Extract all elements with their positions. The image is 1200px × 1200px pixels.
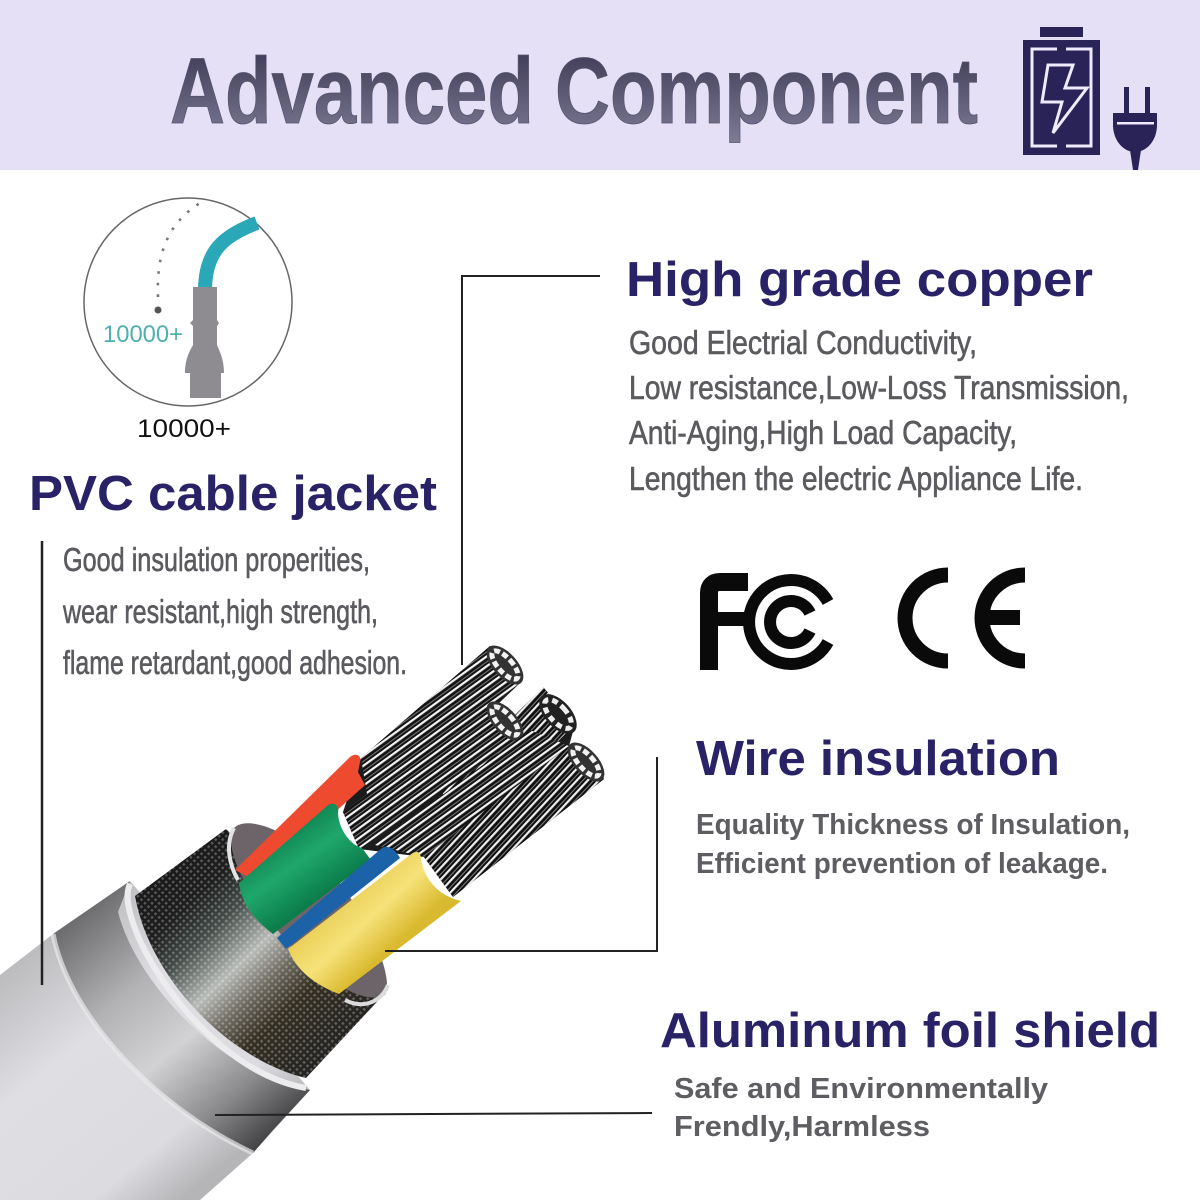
logo: CE (905, 575, 1025, 661)
text: shield features: Frendly,Harmless (674, 1111, 930, 1143)
collar highlight (53, 934, 253, 1153)
text: shield features (674, 1073, 1048, 1143)
yellow wire (288, 852, 461, 994)
text: insulation features: Efficient prevention of leakage. (696, 848, 1108, 880)
jacket ring (128, 884, 306, 1088)
text: insulation features (696, 809, 1130, 880)
icon: plug (1113, 87, 1157, 170)
strands: copper bundle three (424, 746, 604, 897)
text: jacket features: flame retardant,good adhesion. (63, 644, 407, 681)
strands: copper bundle one (361, 646, 520, 800)
label: 10000+: 10000+ (137, 415, 231, 443)
callout line: wire insulation (385, 757, 657, 951)
strands: copper bundle two (343, 703, 520, 849)
heading: wire insulation: Wire insulation (696, 732, 1060, 786)
shield end opening (231, 823, 387, 998)
red wire (235, 755, 365, 882)
heading: aluminum foil shield: Aluminum foil shield (660, 1004, 1160, 1058)
text: shield features: Safe and Environmentally (674, 1073, 1048, 1105)
strands: back bundle (440, 687, 575, 830)
text: insulation features: Equality Thickness of Insulation, (696, 809, 1130, 841)
text: copper features: Good Electrial Conductivity, (629, 324, 977, 361)
text: copper features (629, 324, 1129, 497)
text: copper features: Lengthen the electric Appliance Life. (629, 460, 1083, 497)
braided shield (135, 829, 388, 1078)
strands: base mass (343, 646, 604, 897)
title: Advanced Component (170, 38, 978, 143)
icon: battery (1023, 27, 1100, 155)
text: jacket features (62, 541, 407, 681)
icon: bend test circle: 10000+ (103, 321, 183, 348)
icon: bend test circle (84, 198, 292, 406)
callout line: jacket (41, 541, 43, 985)
text: copper features: Anti-Aging,High Load Capacity, (629, 414, 1017, 451)
heading: pvc cable jacket: PVC cable jacket (29, 467, 437, 521)
green wire (239, 804, 371, 934)
heading: high grade copper: High grade copper (626, 253, 1093, 307)
outer jacket (0, 881, 310, 1200)
text: jacket features: Good insulation properities, (63, 541, 370, 578)
strands: middle bundle (375, 730, 569, 857)
callout line: foil shield (215, 1113, 652, 1115)
callout line: copper (462, 276, 600, 665)
logo: FCC (709, 580, 828, 670)
text: jacket features: wear resistant,high strength, (62, 593, 378, 630)
blue wire (277, 847, 400, 949)
silver jacket collar (53, 881, 310, 1153)
cable illustration (0, 639, 611, 1200)
text: copper features: Low resistance,Low-Loss Transmission, (629, 369, 1129, 406)
header band (0, 0, 1200, 170)
